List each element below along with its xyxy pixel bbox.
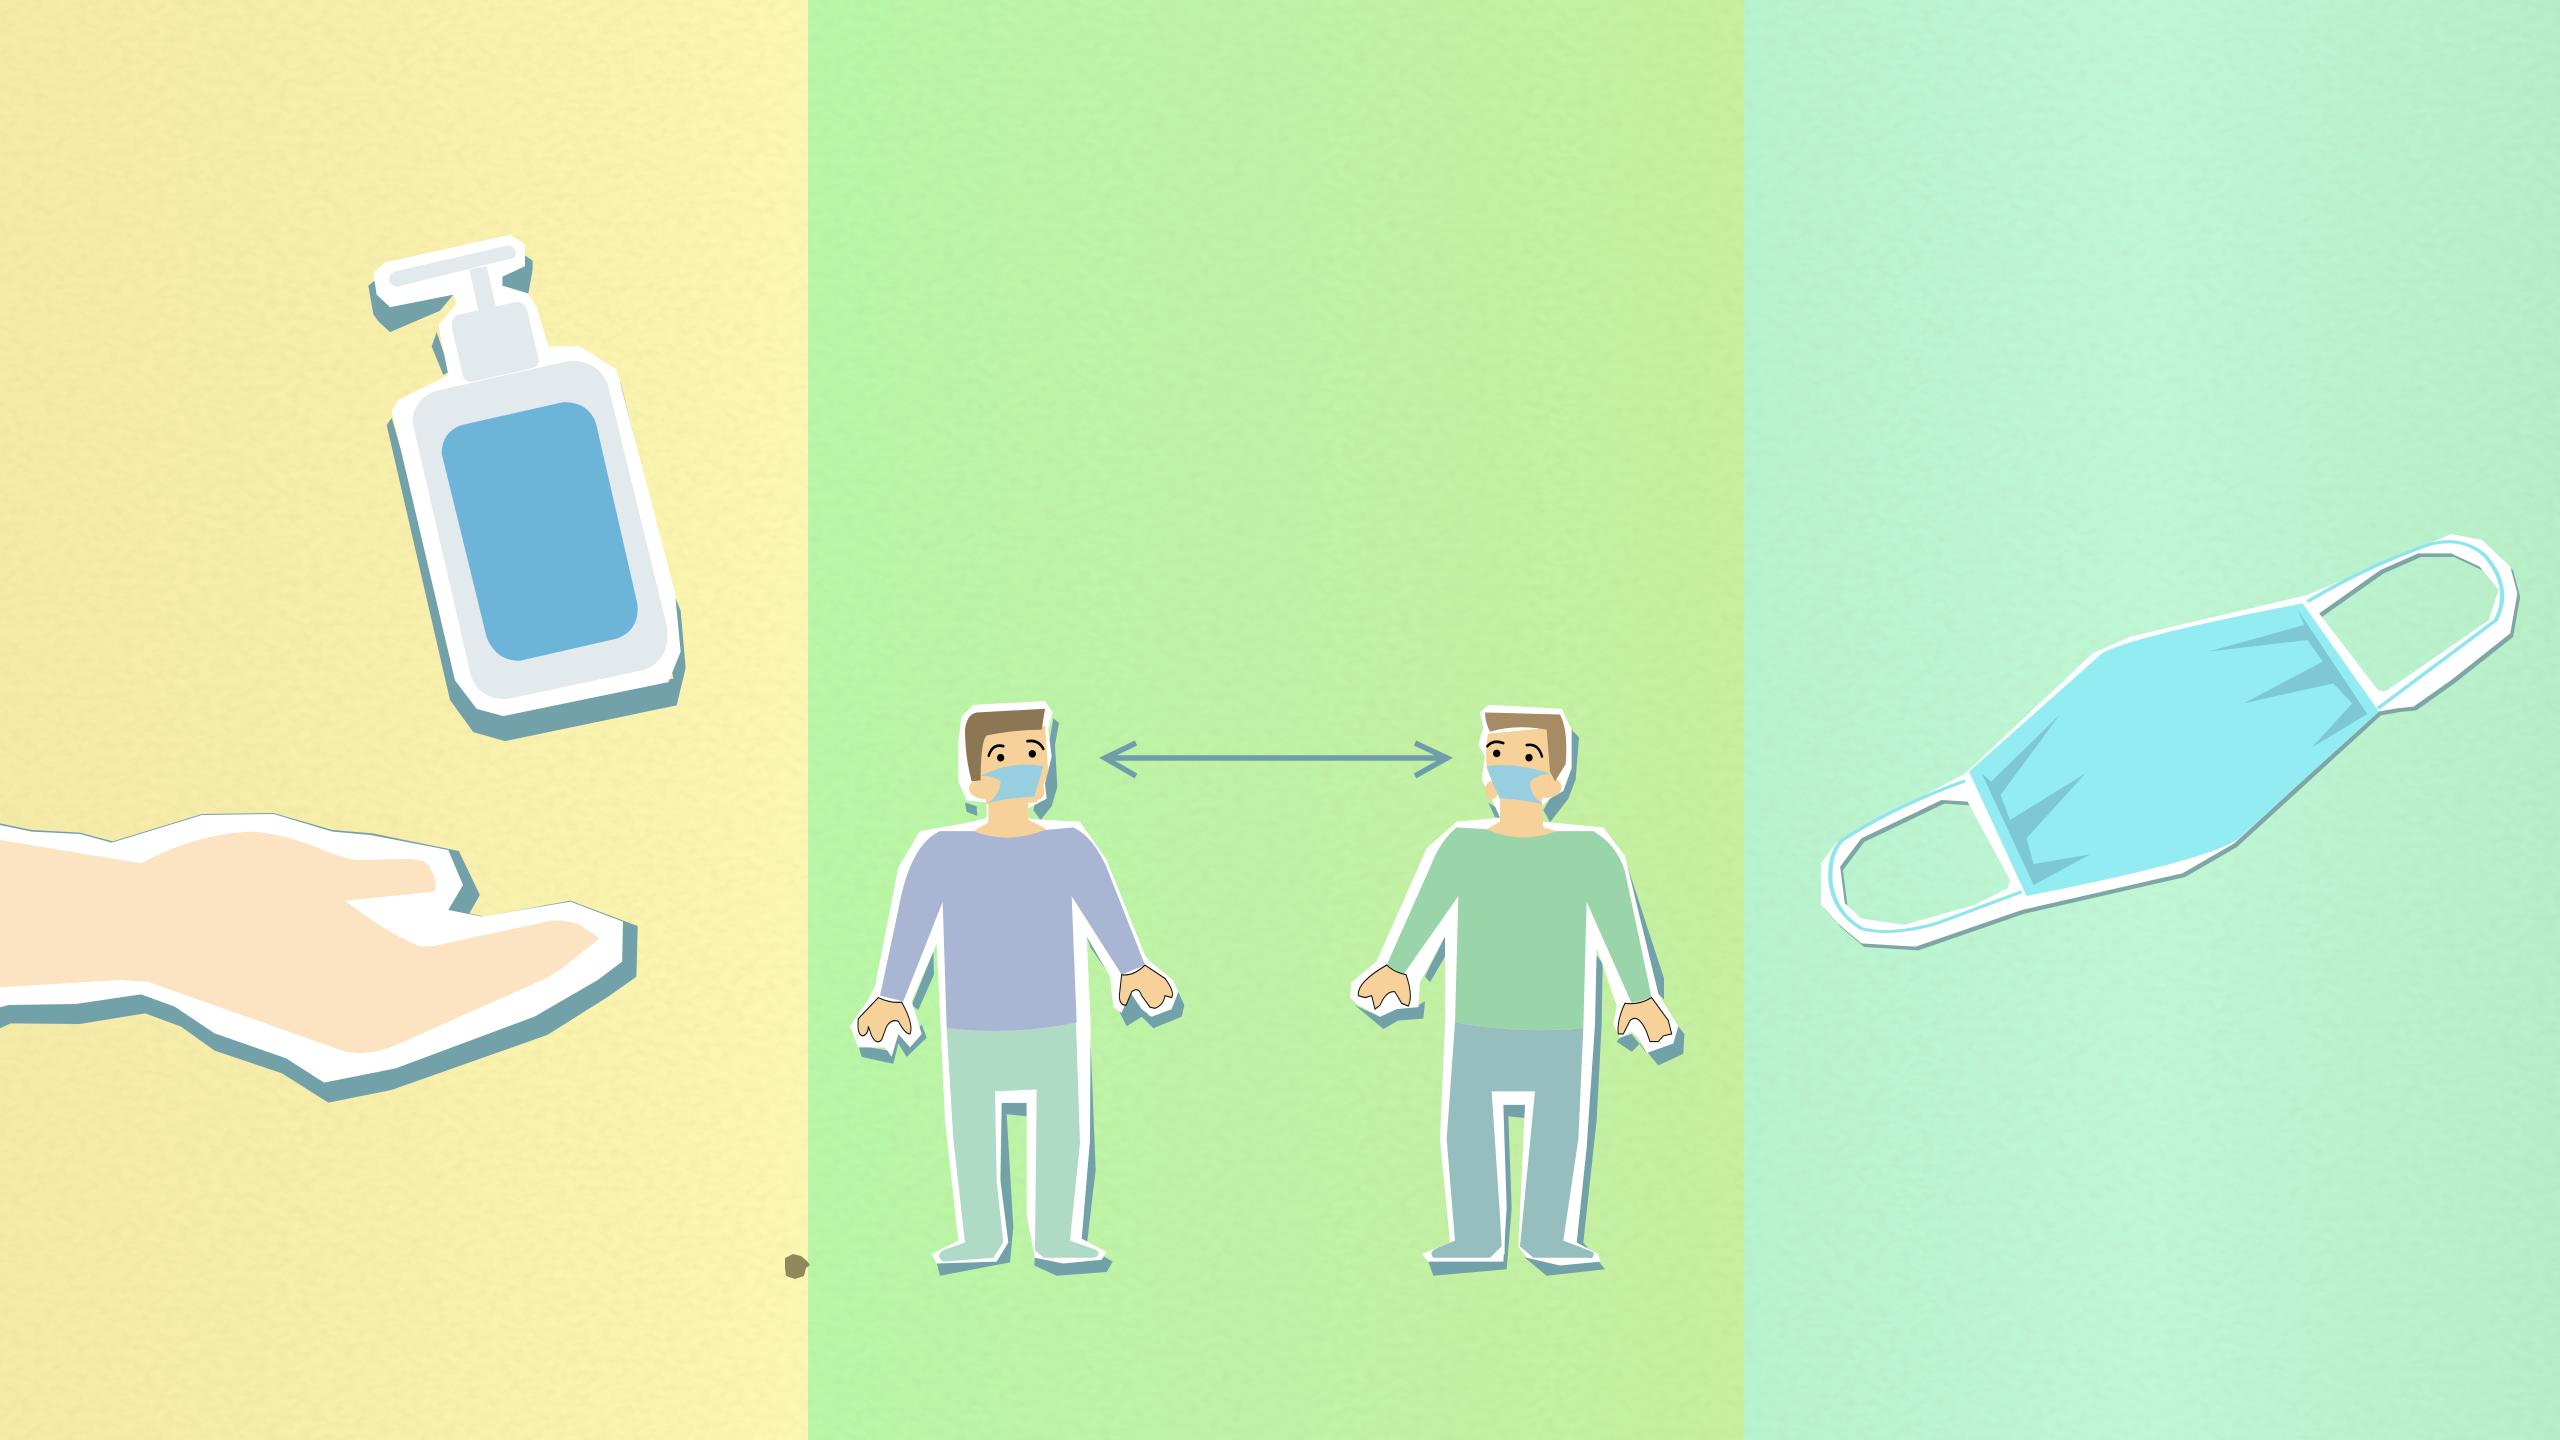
bottle shadow [368,255,686,741]
hand shadow [0,813,638,1103]
mask body [1969,603,2379,896]
ear loops [1830,542,2502,932]
arrow: two metres distance [1104,743,1448,776]
bottle white outline [373,235,681,716]
person shadow [858,718,1184,1276]
left hand [1358,965,1410,1009]
left hand [858,998,911,1042]
trousers [1431,1022,1594,1258]
mask shadow [1824,538,2520,950]
hand white outline [0,814,623,1083]
neck and face [1486,728,1557,838]
person white outline [850,701,1178,1264]
ears [969,778,1001,799]
sweater [880,827,1145,1031]
bottle pump and body [389,245,667,699]
eyes and brows [1487,742,1542,762]
hair [965,709,1045,781]
paper speck [785,1254,810,1279]
neck and face [973,726,1048,838]
right hand [1119,965,1172,1008]
eyes and brows [989,741,1043,762]
icon: open hand [0,813,638,1103]
trousers [939,1022,1099,1262]
icon: person in green sweater [1350,705,1684,1276]
icon: soap pump bottle [368,235,686,741]
right hand [1618,998,1672,1042]
panel: mint paper background [1744,0,2560,1440]
sweater [1387,827,1652,1030]
panel: yellow paper background [0,0,808,1440]
hand skin [0,832,600,1053]
person shadow [1355,730,1684,1276]
icon: surgical face mask [1821,534,2520,950]
person white outline [1350,705,1678,1265]
ears [1532,776,1562,798]
bottle blue label [442,402,638,661]
mask pleats [1982,610,2367,885]
mask white outline [1821,534,2517,947]
panel: green paper background [808,0,1744,1440]
icon: person in blue sweater [850,701,1184,1276]
hair [1485,713,1566,781]
face mask [1487,765,1550,804]
face mask [980,765,1043,803]
